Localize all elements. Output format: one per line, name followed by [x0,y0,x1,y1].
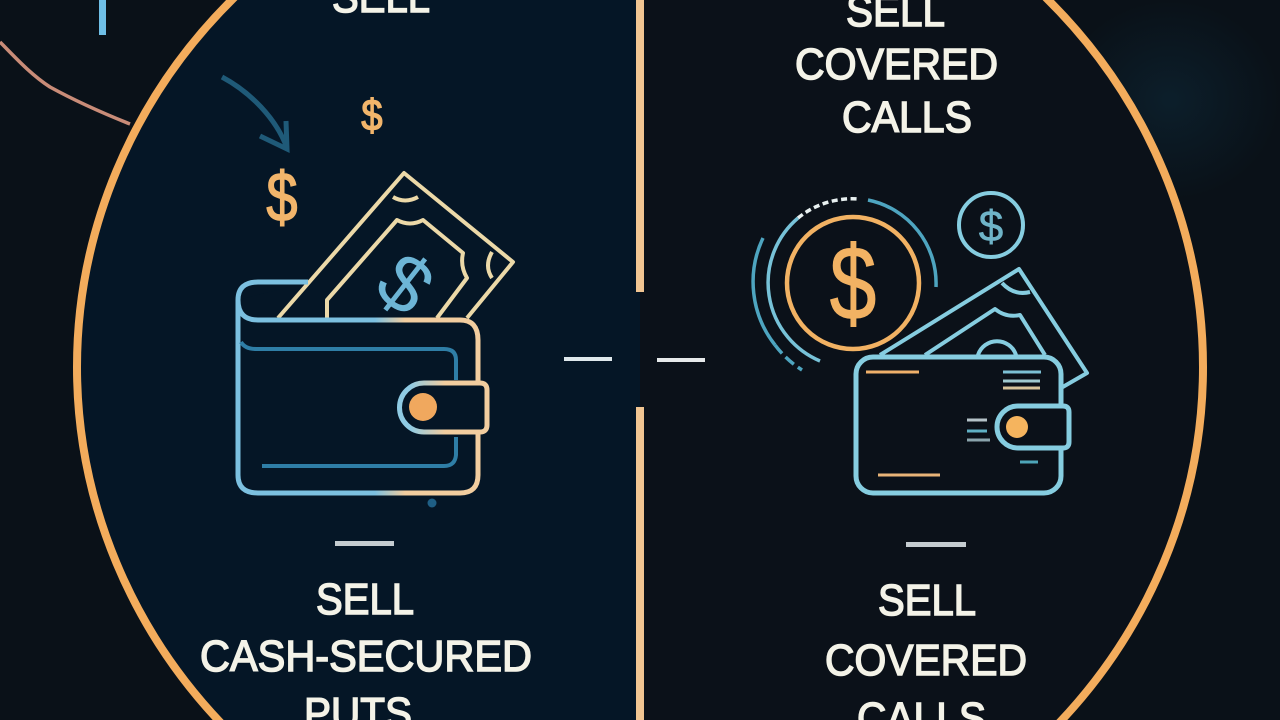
dollar on banknote: $ [360,235,450,332]
top-left blue bar [99,0,106,35]
icon: large dollar: $ [266,159,298,236]
centre divider [564,0,705,720]
trend line [0,42,130,124]
separator [906,542,966,547]
icon: banknote [278,173,513,332]
heading: top right fragment: COVERED [795,40,998,89]
separator [335,541,394,546]
wallet clasp [997,406,1069,448]
coin motion arcs [753,199,936,370]
heading: sell covered calls: COVERED [825,636,1027,685]
heading: top right fragment: CALLS [842,93,972,142]
heading: sell covered calls [825,576,1027,720]
panel: cash-secured puts [200,0,532,720]
panel: left half of the circle [77,0,640,720]
wallet clasp button [409,393,437,421]
icon: wallet [238,282,487,508]
icon: banknotes [880,269,1087,388]
heading: sell cash-secured puts: SELL [316,575,414,624]
icon: small coin [959,193,1023,257]
heading: top right fragment [795,0,998,142]
wallet clasp [400,383,487,432]
heading: sell cash-secured puts [200,575,532,720]
wallet detail lines [866,372,1041,475]
panel: right half of the circle [640,0,1203,720]
icon: small coin: $ [979,202,1003,251]
icon: small dollar: $ [361,90,383,140]
icon: large coin: $ [830,225,876,342]
arrow [222,77,287,149]
panel: covered calls [753,0,1087,720]
icon: wallet [856,357,1069,493]
wallet clasp button [1006,416,1028,438]
wallet dot [428,498,436,508]
heading: sell covered calls: SELL [878,576,976,625]
heading: sell cash-secured puts: CASH-SECURED [200,632,532,681]
icon: large coin [787,217,919,349]
